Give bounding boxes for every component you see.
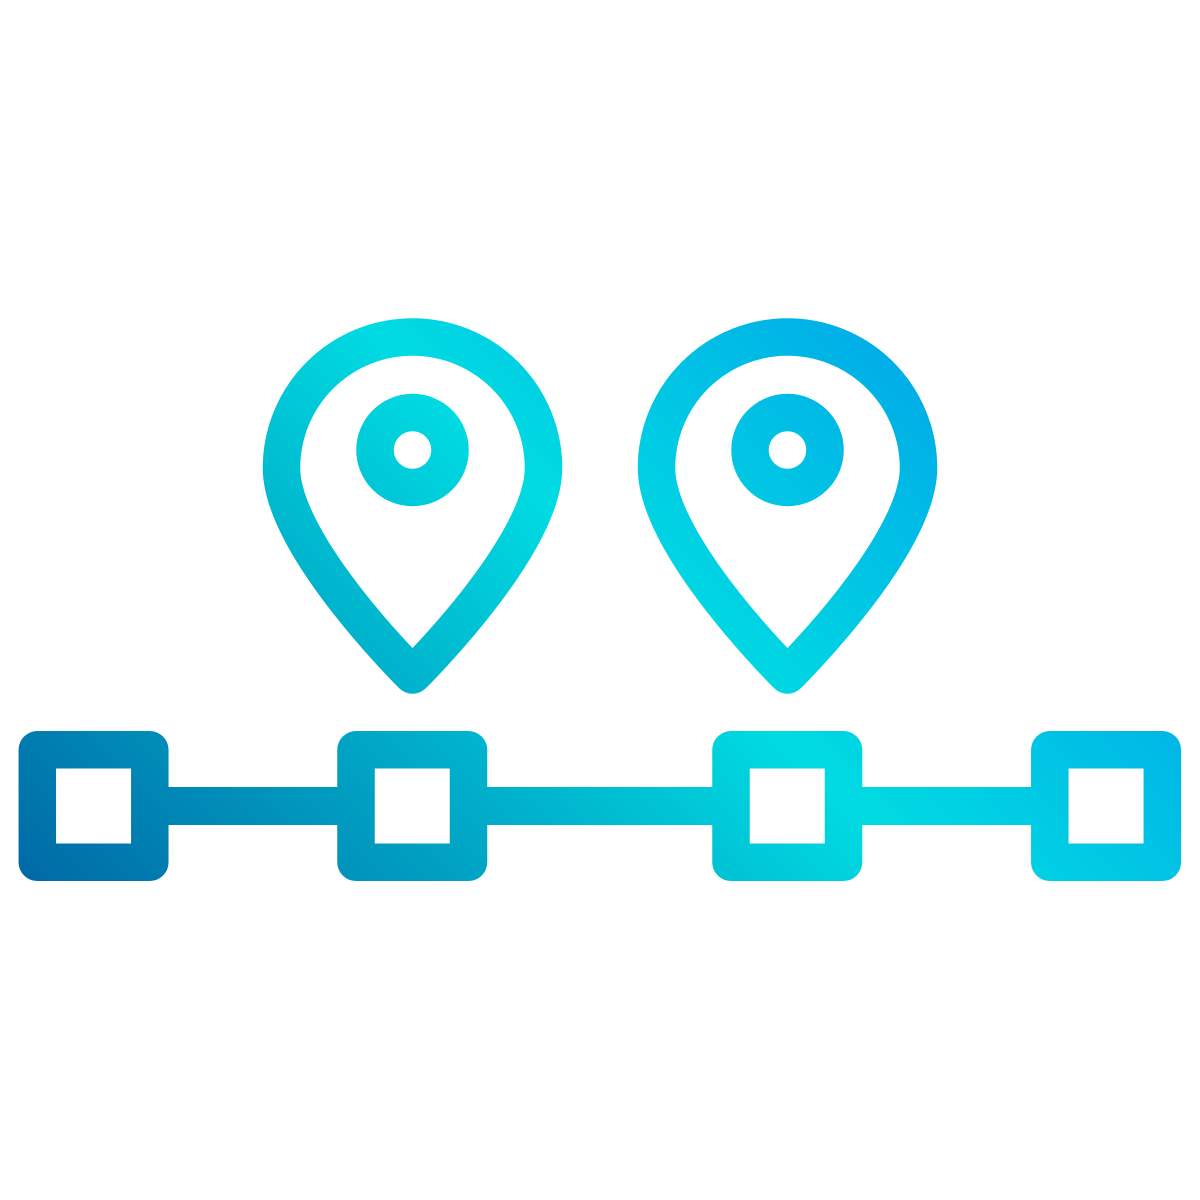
route node squares <box>37 750 1162 862</box>
node 2 <box>356 750 468 862</box>
icon: right location pin <box>656 337 918 675</box>
node 4 <box>1050 750 1162 862</box>
node 1 <box>37 750 150 862</box>
icon: left location pin <box>282 337 544 675</box>
node 3 <box>731 750 844 862</box>
route line connectors <box>168 787 1032 825</box>
